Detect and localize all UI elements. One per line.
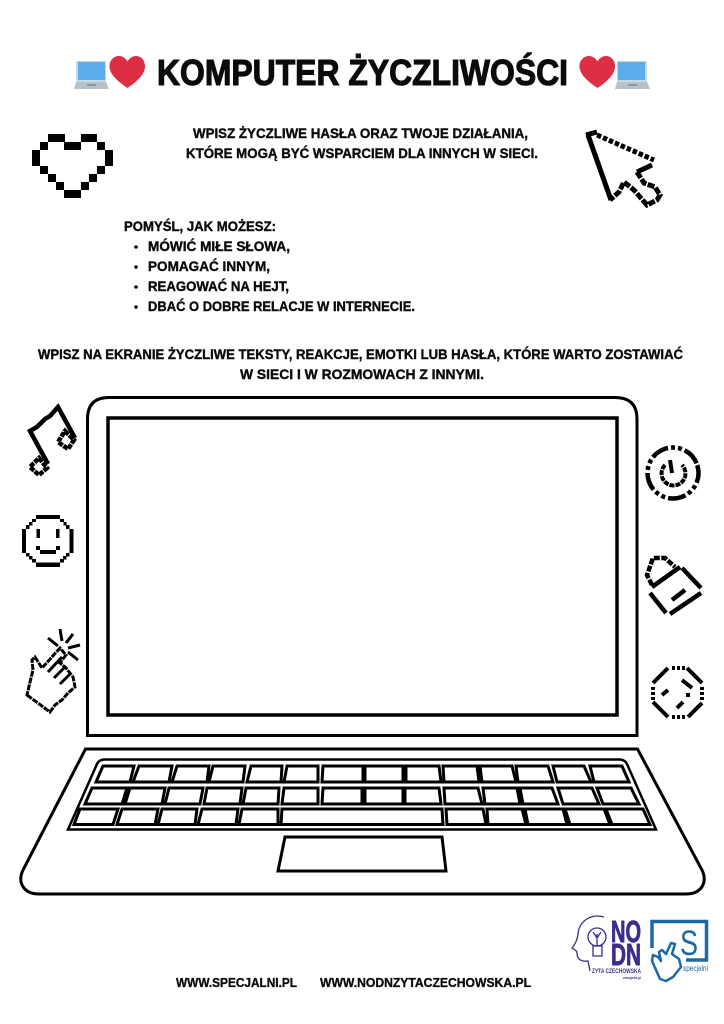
logo subtitle: ZYTA CZECHOWSKA <box>592 968 641 975</box>
instruction text: WPISZ NA EKRANIE ŻYCZLIWE TEKSTY, REAKCJE, EMOTKI LUB HASŁA, KTÓRE WARTO ZOSTAWIAĆ <box>38 345 683 362</box>
NO DN lettering: NO <box>611 914 641 949</box>
icon: laptop emoji right <box>615 61 650 89</box>
instruction text: W SIECI I W ROZMOWACH Z INNYMI. <box>240 366 484 382</box>
icon: red heart left <box>110 56 145 88</box>
icon: pixel heart <box>32 134 113 198</box>
touchpad <box>278 837 446 871</box>
footer links <box>176 975 531 990</box>
title row <box>74 51 650 93</box>
intro text <box>186 125 538 161</box>
icon: pixel padlock <box>647 558 701 614</box>
icon: pixel power button <box>641 441 705 505</box>
thinking prompt list: DBAĆ O DOBRE RELACJE W INTERNECIE. <box>148 297 415 314</box>
hand icon <box>652 943 681 981</box>
keyboard row 1 <box>96 766 629 782</box>
icon: laptop emoji left <box>74 61 109 89</box>
tablet outline <box>652 922 706 960</box>
laptop lid <box>88 398 637 736</box>
laptop screen <box>108 418 617 715</box>
instruction text <box>38 345 683 382</box>
thinking prompt list: REAGOWAĆ NA HEJT, <box>148 277 289 294</box>
letter S: S <box>680 924 698 963</box>
thinking prompt list <box>124 217 415 314</box>
thinking prompt list: MÓWIĆ MIŁE SŁOWA, <box>148 237 290 254</box>
laptop base <box>21 749 704 894</box>
keyboard frame <box>68 760 656 830</box>
keyboard row 2 <box>85 788 639 804</box>
logo small address: zswsjedn.pl <box>623 976 641 980</box>
title text: KOMPUTER ŻYCZLIWOŚCI <box>157 51 568 93</box>
logo: NODN Zyta Czechowska <box>572 914 641 980</box>
icon: red heart right <box>580 56 615 88</box>
icon: pixel hand tapping <box>27 629 80 712</box>
footer links: WWW.SPECJALNI.PL <box>176 975 297 990</box>
specjalni wordmark: specjalni <box>683 964 708 973</box>
icon: pixel emoji face <box>653 668 702 717</box>
icon: pixel music note <box>30 407 75 475</box>
icon: pixel smiley <box>22 515 74 567</box>
footer links: WWW.NODNZYTACZECHOWSKA.PL <box>320 975 531 990</box>
keyboard row 3 <box>74 809 650 824</box>
logo: NODN Zyta Czechowska: DN <box>611 937 641 972</box>
thinking prompt list: POMYŚL, JAK MOŻESZ: <box>124 217 276 234</box>
intro text: WPISZ ŻYCZLIWE HASŁA ORAZ TWOJE DZIAŁANIA, <box>193 125 528 141</box>
icon: pixel cursor arrow <box>586 132 660 205</box>
laptop illustration <box>21 398 704 894</box>
thinking prompt list: POMAGAĆ INNYM, <box>148 257 270 274</box>
intro text: KTÓRE MOGĄ BYĆ WSPARCIEM DLA INNYCH W SIECI. <box>186 144 538 161</box>
logo: specjalni <box>652 922 708 981</box>
head with light bulb <box>572 916 606 971</box>
